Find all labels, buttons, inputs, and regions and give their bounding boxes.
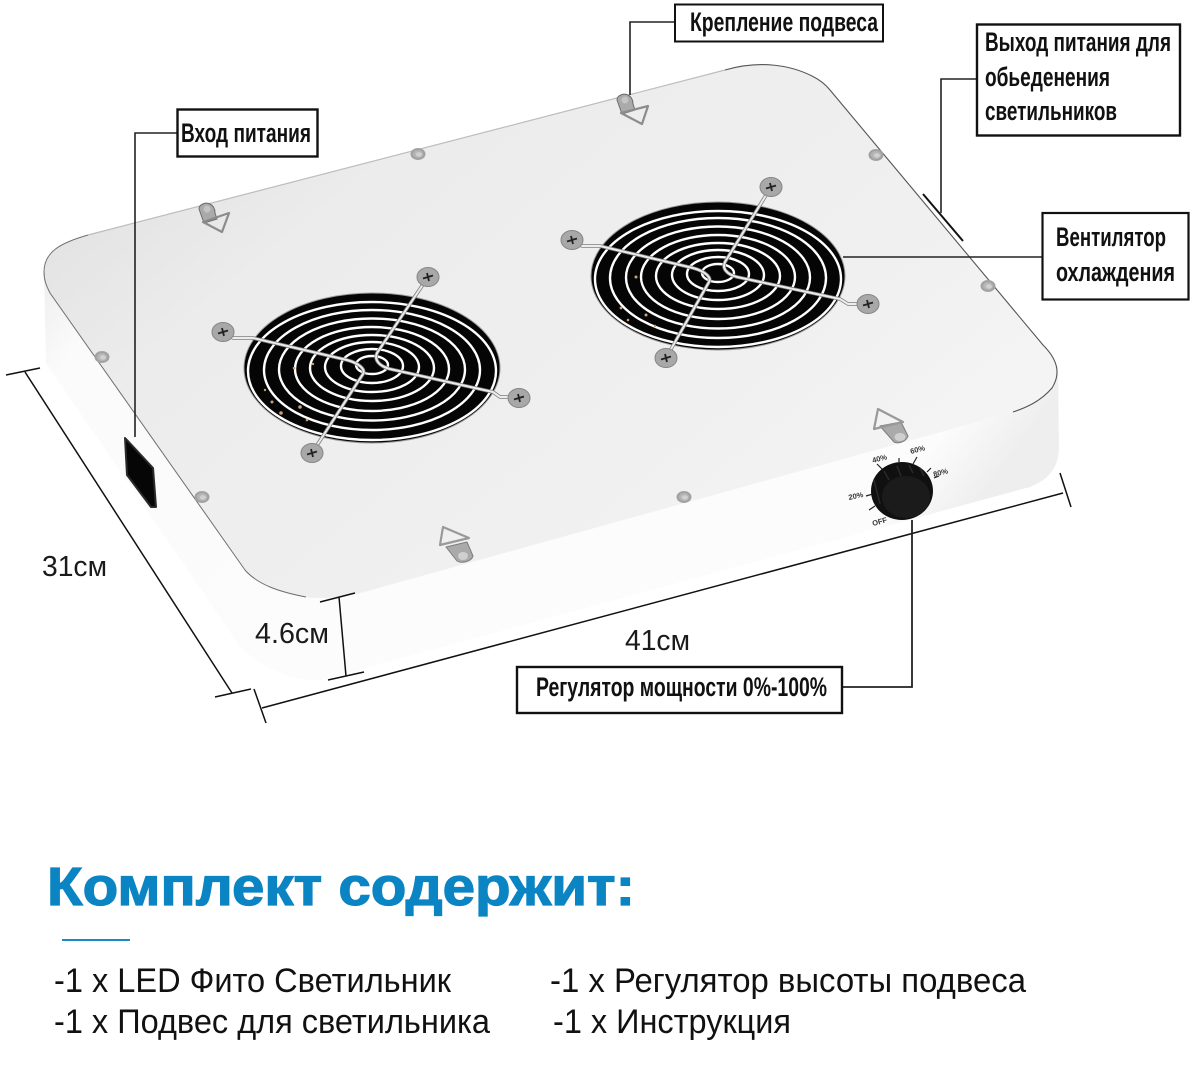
lamp body xyxy=(44,65,1059,680)
lamp side face xyxy=(44,272,1059,680)
callout: suspension mount xyxy=(630,4,883,95)
callout: power output: обьеденения xyxy=(985,62,1110,92)
callout: power regulator: Регулятор мощности 0%-100% xyxy=(536,672,827,702)
led specks xyxy=(620,276,656,327)
power knob xyxy=(848,443,949,528)
fan screws xyxy=(212,322,234,342)
hook bottom-left xyxy=(440,527,473,562)
heading underline xyxy=(62,939,130,941)
hook top-left xyxy=(199,203,229,232)
callout: power input xyxy=(135,110,318,437)
dimension: 31 cm: 31см xyxy=(42,551,107,583)
fan wires xyxy=(223,277,520,453)
small bolts xyxy=(95,148,995,502)
lamp right outline xyxy=(725,65,1057,412)
contents list: -1 x Регулятор высоты подвеса xyxy=(550,962,1026,1000)
power knob: 80% xyxy=(932,466,949,479)
dimension: 41 cm xyxy=(254,473,1071,723)
power knob: 60% xyxy=(909,443,926,456)
power knob: 40% xyxy=(871,452,888,465)
fan screws xyxy=(561,230,583,250)
dimension: 4.6 cm xyxy=(255,593,364,680)
fan left xyxy=(212,268,530,462)
contents list xyxy=(54,962,1026,1041)
contents list: -1 x LED Фито Светильник xyxy=(54,962,452,1000)
lamp top edge highlight xyxy=(88,70,725,235)
dimension: 31 cm xyxy=(6,368,251,697)
power socket xyxy=(125,438,156,507)
fan right xyxy=(561,178,879,368)
led specks xyxy=(264,363,314,421)
callout: power regulator xyxy=(517,520,912,713)
power knob: OFF xyxy=(871,515,888,528)
fan wires xyxy=(572,187,868,358)
hook top-middle xyxy=(617,94,648,124)
lamp left outline xyxy=(44,235,306,597)
lamp top face xyxy=(44,65,1057,598)
callout: cooling fan xyxy=(843,213,1188,300)
dimension: 41 cm: 41см xyxy=(625,625,690,657)
contents list: -1 x Инструкция xyxy=(553,1003,791,1041)
callout: power input: Вход питания xyxy=(181,118,311,148)
callout: power output xyxy=(923,24,1180,241)
callout: power output: светильников xyxy=(985,96,1117,126)
hook bottom-right xyxy=(874,409,908,443)
dimension: 4.6 cm: 4.6см xyxy=(255,618,329,650)
power knob: 20% xyxy=(848,490,864,502)
contents list: -1 x Подвес для светильника xyxy=(54,1003,490,1041)
callout: suspension mount: Крепление подвеса xyxy=(690,7,879,37)
heading: Комплект содержит: xyxy=(47,856,635,917)
